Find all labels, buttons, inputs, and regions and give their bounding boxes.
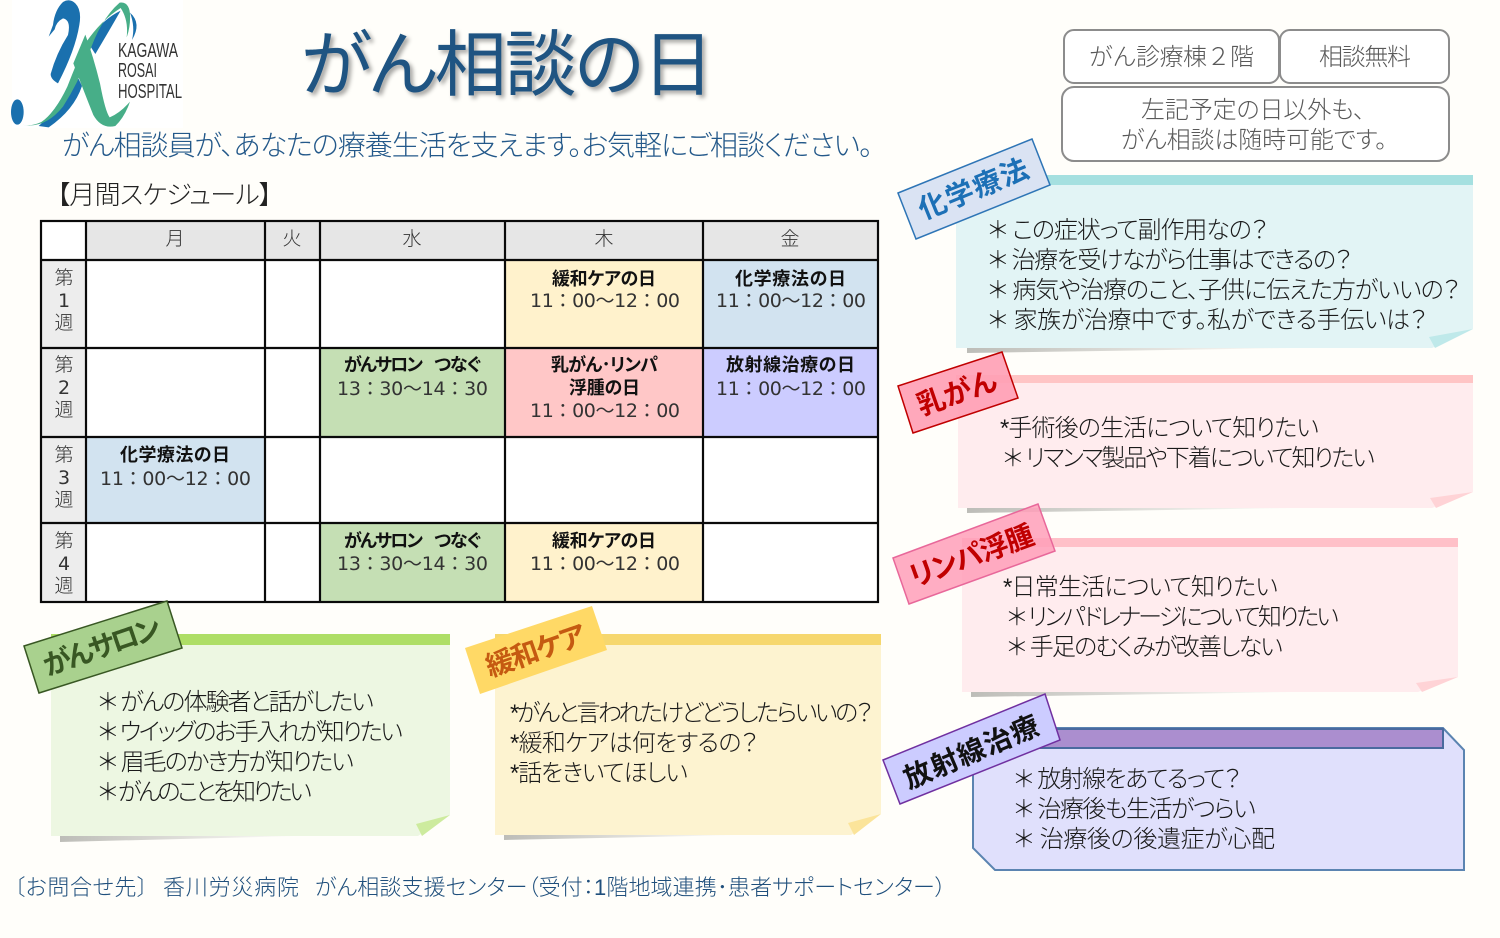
monthly schedule table: 浮腫の日 [569,378,640,398]
panel: breast cancer: ＊ リマンマ製品や下着について知りたい [1003,445,1375,472]
monthly schedule table: 乳がん･リンパ [551,354,658,375]
monthly schedule table: 緩和ケアの日 [552,269,656,289]
footer contact: 香川労災病院 [163,875,299,900]
monthly schedule table: 第 [54,267,74,289]
panel: cancer salon: ＊ がんの体験者と話がしたい [98,689,374,716]
panel: palliative care: *緩和ケアは何をするの？ [510,730,758,757]
monthly schedule table: 11：00～12：00 [716,378,866,400]
monthly schedule table: 放射線治療の日 [726,355,855,375]
monthly schedule table: 11：00～12：00 [716,290,866,312]
panel: lymphedema: *日常生活について知りたい [1003,574,1278,601]
panel: chemotherapy [898,139,1473,353]
monthly schedule table: 週 [54,312,74,334]
panel: chemotherapy: ＊ 治療を受けながら仕事はできるの？ [988,247,1352,274]
hospital logo: KAGAWA [118,40,178,62]
monthly schedule table: 11：00～12：00 [530,290,680,312]
monthly schedule table: 木 [594,228,614,250]
panel: lymphedema: ＊ 手足のむくみが改善しない [1007,634,1283,661]
panel: breast cancer: 乳がん [913,364,1001,421]
monthly schedule table: 第 [54,530,74,552]
panel: radiation therapy: ＊ 治療後の後遺症が心配 [1014,826,1275,853]
monthly schedule table: 緩和ケアの日 [552,531,656,551]
panel: radiation therapy: ＊ 放射線をあてるって？ [1014,766,1241,793]
panel: cancer salon: ＊ がんのことを知りたい [98,779,312,806]
monthly schedule table: 11：00～12：00 [100,468,251,490]
monthly schedule table: 週 [54,575,74,597]
hospital logo: ROSAI [118,60,157,82]
monthly schedule table: 3 [58,467,70,489]
monthly schedule table: 第 [54,354,74,376]
monthly schedule table: 月 [165,229,185,250]
footer contact: 〔お問合せ先〕 [14,875,148,900]
panel: palliative care: *話をきいてほしい [510,760,688,787]
panel: radiation therapy: 放射線治療 [899,710,1044,795]
panel: radiation therapy [883,694,1464,870]
title: がん相談の日 [301,26,714,106]
location and fee badges: がん相談は随時可能です。 [1121,127,1387,154]
panel: lymphedema: リンパ浮腫 [905,519,1038,593]
location and fee badges [1062,30,1449,161]
monthly schedule table: 水 [402,228,422,250]
monthly schedule table: 火 [282,229,302,250]
monthly schedule table: 11：00～12：00 [530,553,680,575]
panel: radiation therapy: ＊ 治療後も生活がつらい [1014,796,1256,823]
monthly schedule table: 金 [780,228,800,250]
panel: palliative care: *がんと言われたけどどうしたらいいの？ [510,700,873,727]
panel: chemotherapy: ＊ 家族が治療中です。私ができる手伝いは？ [988,307,1427,334]
hospital logo [11,0,183,128]
monthly schedule table: 化学療法の日 [735,268,846,289]
monthly schedule table: がんサロン [344,530,423,551]
footer contact [14,875,946,900]
monthly schedule table: 13：30～14：30 [337,553,488,575]
hospital logo: HOSPITAL [118,81,182,103]
monthly schedule table: 1 [58,290,70,312]
monthly schedule table: 週 [54,489,74,511]
location and fee badges: 相談無料 [1319,44,1411,71]
location and fee badges: 左記予定の日以外も、 [1141,97,1365,124]
panel: palliative care: 緩和ケア [482,619,590,683]
location and fee badges: がん診療棟２階 [1089,44,1254,71]
panel: lymphedema: ＊ リンパドレナージについて知りたい [1007,604,1339,631]
subtitle: がん相談員が、あなたの療養生活を支えます。お気軽にご相談ください。 [62,130,873,161]
monthly schedule table: 13：30～14：30 [337,378,488,400]
footer contact: がん相談支援センター（受付：1階地域連携･患者サポートセンター） [315,875,946,900]
panel: chemotherapy: ＊ 病気や治療のこと、子供に伝えた方がいいの？ [988,277,1460,304]
panel: breast cancer: *手術後の生活について知りたい [1000,415,1319,442]
panel: chemotherapy: 化学療法 [914,153,1033,225]
panel: cancer salon: ＊ 眉毛のかき方が知りたい [98,749,354,776]
monthly schedule table: 2 [58,377,70,399]
monthly schedule table: 11：00～12：00 [530,400,680,422]
panel: cancer salon: がんサロン [39,612,165,682]
panel: cancer salon: ＊ ウイッグのお手入れが知りたい [98,719,403,746]
panel: palliative care [465,606,881,840]
panel: breast cancer [898,352,1473,513]
monthly schedule table: つなぐ [434,531,481,551]
schedule heading: 【月間スケジュール】 [57,180,272,210]
panel: lymphedema [893,504,1458,697]
monthly schedule table: つなぐ [434,355,481,375]
monthly schedule table: 週 [54,399,74,421]
panel: cancer salon [24,601,450,842]
panel: chemotherapy: ＊ この症状って副作用なの？ [988,217,1268,244]
monthly schedule table: がんサロン [344,354,423,375]
monthly schedule table [41,221,878,602]
monthly schedule table: 化学療法の日 [120,444,230,465]
monthly schedule table: 4 [58,553,70,575]
monthly schedule table: 第 [54,444,74,466]
